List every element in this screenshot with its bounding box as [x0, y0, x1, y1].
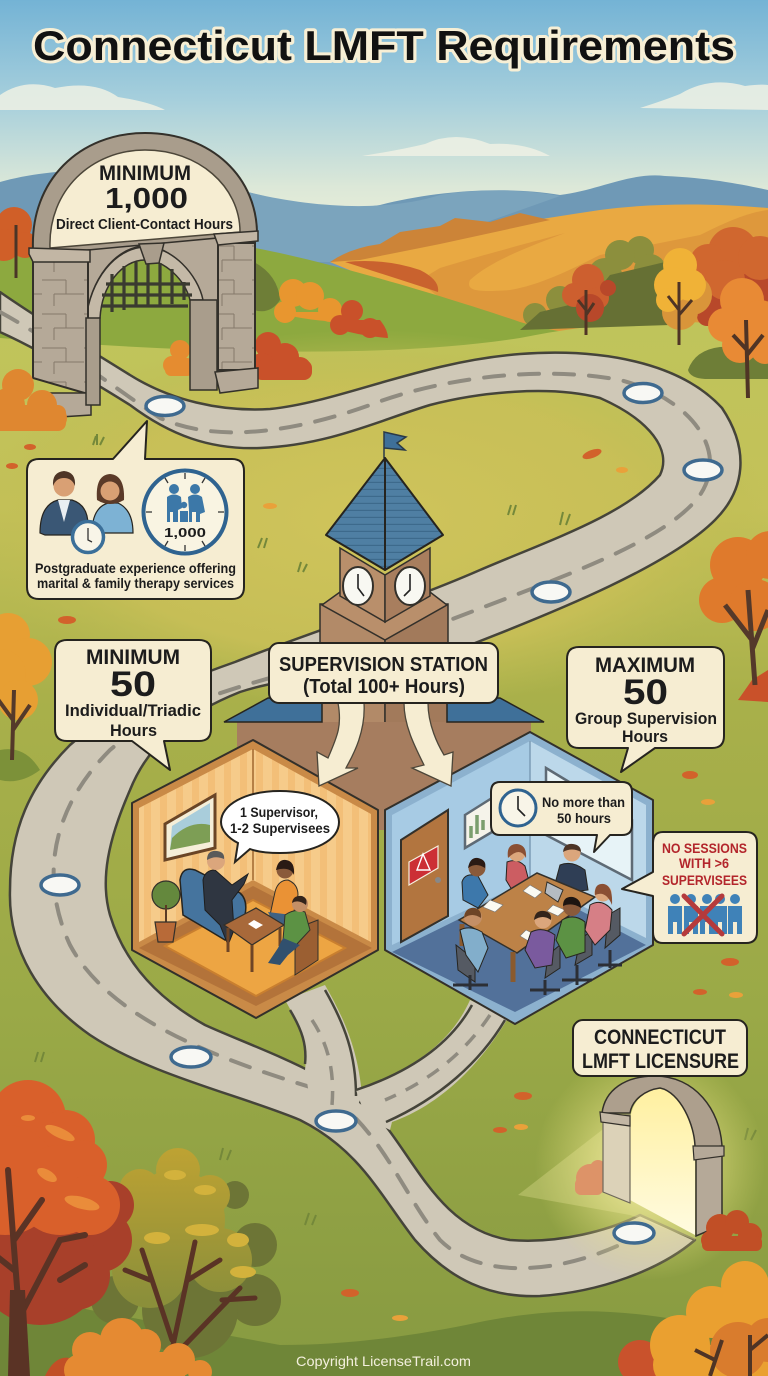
- clock face right: [395, 567, 425, 605]
- callout: maximum 50 group supervision: Group Supervision: [575, 709, 717, 728]
- right base: [215, 368, 258, 393]
- station building wall: [237, 722, 531, 830]
- marker: road stop 7: [316, 1111, 356, 1131]
- flag: [384, 432, 406, 458]
- arch ring: [86, 247, 203, 320]
- right pillar: [696, 1150, 722, 1236]
- callout: no sessions with more than 6 supervisees: NO SESSIONS: [662, 841, 747, 856]
- hillside shadow strips: [420, 210, 768, 345]
- tree: left yellow: [0, 613, 52, 781]
- sunlit central field: [0, 330, 768, 710]
- back left wall: [392, 741, 530, 945]
- callout: no sessions with more than 6 supervisees: SUPERVISEES: [662, 873, 747, 888]
- tree: right orange: [699, 531, 768, 702]
- left pillar: [603, 1115, 630, 1203]
- icon: female professional: [92, 474, 133, 533]
- wall chart: [465, 798, 492, 848]
- bush: bottom orange: [45, 1318, 212, 1376]
- starting gate arch: [29, 133, 258, 417]
- label: supervision station: SUPERVISION STATION: [279, 654, 488, 676]
- marker: road stop 2: [624, 384, 662, 402]
- room: individual supervision: [132, 740, 378, 1018]
- right arch pier: [190, 300, 217, 390]
- clock block right: [385, 548, 430, 622]
- tower ledge: [322, 592, 447, 640]
- round stone crown: [33, 133, 257, 252]
- back left wall: [139, 749, 253, 942]
- stone arch: [602, 1076, 722, 1148]
- potted plant: [152, 881, 180, 942]
- lighter mountain ridge: [240, 190, 560, 262]
- clock tower: [320, 432, 448, 725]
- gate text: minimum 1,000 hours: MINIMUM: [99, 162, 191, 185]
- callout: no sessions with more than 6 supervisees: WITH >6: [679, 856, 729, 871]
- bushes behind gate: [163, 262, 388, 380]
- tree: top left behind gate: [0, 207, 38, 278]
- clock face left: [343, 567, 373, 605]
- wooden floor: [139, 886, 372, 1006]
- callout: minimum 50 individual/triadic: Individual/Triadic: [65, 701, 201, 720]
- bottom dark hill: [0, 1290, 768, 1376]
- right capital: [214, 231, 258, 245]
- sky: [0, 0, 768, 250]
- gate text: minimum 1,000 hours: Direct Client-Contact Hours: [56, 217, 233, 233]
- clock block left: [340, 548, 385, 622]
- callout: maximum 50 group supervision: [567, 647, 724, 772]
- marker: road stop 1: [146, 396, 184, 416]
- callout text: [35, 560, 236, 591]
- callout: postgraduate experience: [27, 421, 244, 599]
- outer base: [132, 740, 378, 1018]
- front row people: [456, 884, 620, 982]
- coffee table: [224, 908, 284, 972]
- road branch from group room: [356, 1000, 508, 1130]
- icon: male professional: [40, 471, 88, 535]
- label: connecticut licensure: CONNECTICUT: [594, 1026, 726, 1049]
- wall corner line: [529, 741, 531, 880]
- label: supervision station: [269, 643, 498, 703]
- left capital: [600, 1112, 630, 1126]
- label: supervision station: (Total 100+ Hours): [303, 676, 465, 698]
- icon: family clock: 1,000: [164, 526, 206, 540]
- opening: [630, 1088, 695, 1235]
- near light hill: [0, 322, 768, 1376]
- icon: crossed-out group: [668, 894, 742, 934]
- distant blue mountains: [0, 170, 768, 330]
- marker: road stop 4: [532, 582, 570, 602]
- marker: road stop 8: [614, 1223, 654, 1243]
- window: [546, 768, 632, 880]
- orange rug: [165, 900, 345, 996]
- callout text: marital & family therapy services: [37, 575, 234, 591]
- lintel with arch opening: [86, 238, 218, 320]
- portcullis grid: [102, 261, 192, 312]
- label: connecticut licensure: [573, 1020, 747, 1076]
- callout text: Postgraduate experience offering: [35, 560, 236, 576]
- callout: no more than 50 hours: [491, 782, 632, 852]
- right capital: [693, 1146, 724, 1160]
- callout: maximum 50 group supervision: MAXIMUM: [595, 654, 695, 677]
- road branch from counseling room: [285, 985, 362, 1125]
- arrow: to group room: [404, 703, 453, 786]
- marker: road stop 5: [41, 875, 79, 895]
- meeting table and participants: [453, 844, 622, 995]
- callout: maximum 50 group supervision: 50: [623, 673, 668, 712]
- callout: no more than 50 hours: No more than: [542, 794, 625, 810]
- back right wall: [253, 749, 371, 942]
- faded bush by gate: [575, 1160, 606, 1195]
- label: connecticut licensure: LMFT LICENSURE: [582, 1050, 739, 1073]
- right blue eave: [447, 698, 544, 722]
- supervisee in orange: [268, 860, 298, 925]
- marker: road stop 6: [171, 1047, 211, 1067]
- conference table: [459, 873, 595, 953]
- distant autumn tree line: [330, 213, 550, 292]
- tree: bottom-left large orange: [0, 1080, 134, 1376]
- green meadow: [0, 242, 768, 420]
- light beam on ground: [518, 1130, 715, 1240]
- back right wall: [530, 741, 646, 938]
- left pillar: [33, 258, 88, 394]
- back row people: [462, 844, 588, 908]
- painting: [165, 795, 215, 860]
- tower lower body right: [385, 604, 448, 725]
- gate text: minimum 1,000 hours: [56, 162, 233, 233]
- speech bubble: 1 supervisor: [221, 791, 339, 862]
- room: group supervision: [385, 732, 653, 1024]
- inner arch pier left: [86, 318, 100, 405]
- cream plaque: [50, 150, 240, 248]
- supervisor figure: [203, 851, 248, 945]
- supervisee in green: [268, 896, 318, 975]
- licensure gate: [518, 1050, 765, 1280]
- clouds: [0, 82, 768, 156]
- callout: minimum 50 individual/triadic: Hours: [110, 721, 157, 740]
- icon: small clock: [72, 522, 104, 552]
- copyright footer: Copyright LicenseTrail.com: [296, 1353, 471, 1369]
- callout: minimum 50 individual/triadic: 50: [110, 665, 156, 704]
- wall corner line: [252, 749, 254, 880]
- gate glow: [535, 1050, 765, 1280]
- marker: road stop 3: [684, 460, 722, 480]
- callout: no sessions with more than 6 supervisees: [622, 832, 757, 943]
- gate text: minimum 1,000 hours: 1,000: [105, 183, 188, 215]
- left blue eave: [224, 698, 322, 722]
- callout: minimum 50 individual/triadic: MINIMUM: [86, 646, 180, 669]
- tree: bottom-right orange: [618, 1261, 768, 1376]
- green bush under orange tree: [688, 345, 768, 379]
- icon: family clock: [144, 470, 226, 554]
- callout: no more than 50 hours: 50 hours: [557, 810, 611, 826]
- keystone: [139, 243, 164, 264]
- winding road: [0, 292, 740, 1296]
- arrow: to individual room: [317, 703, 364, 786]
- orange autumn hillside: [330, 204, 768, 345]
- tree: bottom olive: [91, 1148, 281, 1358]
- left base: [50, 393, 91, 417]
- icon: clock: [500, 790, 536, 826]
- blue floor: [392, 884, 646, 1012]
- scattered leaves and grass: [6, 434, 756, 1321]
- orange bush at gate base: [0, 369, 67, 431]
- tower lower body: [320, 604, 385, 725]
- right pillar: [218, 243, 255, 370]
- callout: maximum 50 group supervision: Hours: [622, 727, 668, 746]
- left capital: [29, 248, 90, 262]
- background trees on right: [520, 227, 768, 398]
- outer base: [385, 732, 653, 1024]
- title: Connecticut LMFT Requirements: [33, 22, 735, 69]
- speech bubble: 1 supervisor: 1-2 Supervisees: [230, 820, 330, 836]
- blue spire roof: [326, 458, 443, 570]
- door with warning sign: [401, 810, 448, 942]
- armchair: [180, 869, 246, 940]
- speech bubble: 1 supervisor: 1 Supervisor,: [240, 804, 318, 820]
- red bush by gate: [701, 1210, 762, 1251]
- callout: minimum 50 individual/triadic: [55, 640, 211, 770]
